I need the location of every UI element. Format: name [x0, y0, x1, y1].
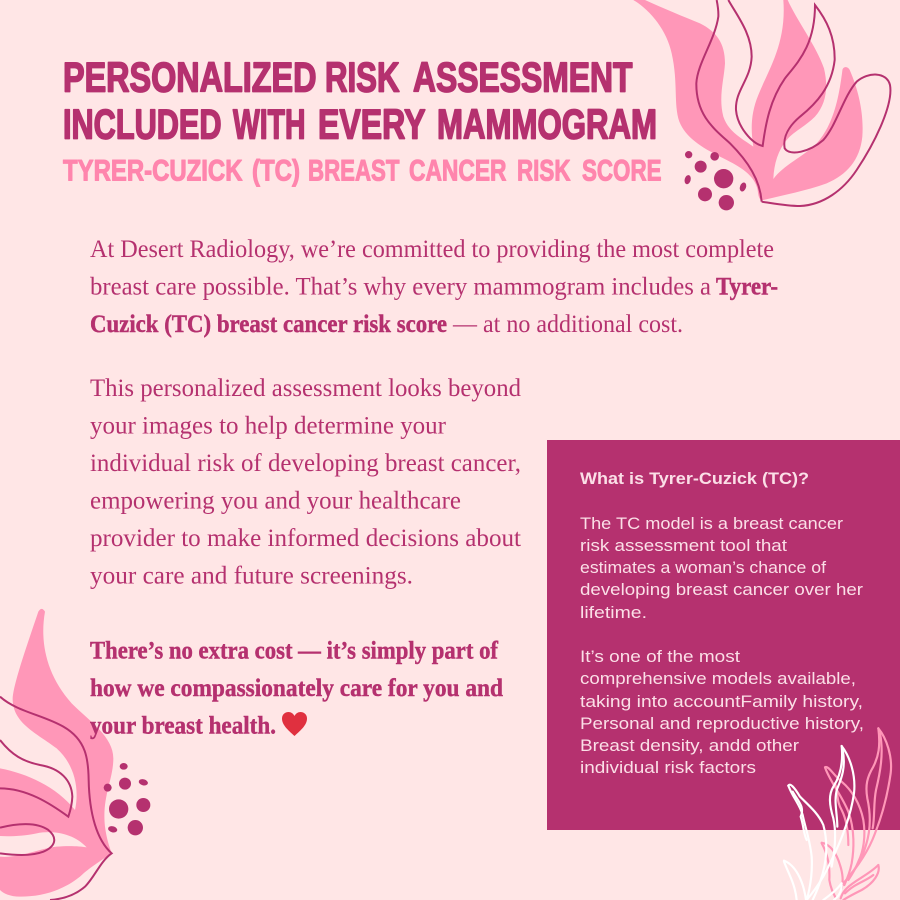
paragraph: personalized assessment: provider to make informed decisions about	[90, 525, 521, 552]
decoration: top-right floral leaves	[633, 0, 890, 210]
subtitle: SCORE	[582, 154, 662, 188]
title heading	[63, 54, 657, 148]
title heading: MAMMOGRAM	[437, 100, 657, 148]
paragraph: personalized assessment: your care and future screenings.	[90, 562, 413, 590]
callout: no extra cost: your breast health.	[90, 712, 276, 740]
subtitle: BREAST	[308, 154, 400, 188]
panel text: definition: risk assessment tool that	[580, 536, 787, 555]
panel text: risk factors	[580, 647, 864, 777]
panel heading: What is Tyrer-Cuzick (TC)?	[580, 469, 809, 488]
title heading: WITH	[233, 100, 306, 148]
panel text: definition	[580, 514, 863, 622]
panel text: definition: The TC model is a breast cancer	[580, 514, 843, 533]
intro paragraph: At Desert Radiology, we’re committed to providing the most complete	[90, 236, 774, 263]
decoration: bottom-right seaweed lines	[784, 728, 891, 900]
panel text: risk factors: Personal and reproductive history,	[580, 714, 864, 733]
intro paragraph: Tyrer-	[716, 274, 778, 300]
title heading: ASSESSMENT	[413, 54, 633, 100]
paragraph: personalized assessment: empowering you and your healthcare	[90, 488, 461, 514]
subtitle: CANCER	[409, 154, 507, 188]
title heading: PERSONALIZED	[63, 54, 316, 100]
intro paragraph: breast care possible. That’s why every mammogram includes a	[90, 274, 711, 300]
decoration: bottom-left floral leaves	[0, 609, 150, 900]
callout: no extra cost: There’s no extra cost — it’s simply part of	[90, 638, 499, 664]
panel text: definition: estimates a woman’s chance of	[580, 558, 826, 577]
title heading: EVERY	[318, 100, 426, 148]
subtitle	[63, 154, 662, 188]
intro paragraph	[90, 236, 778, 338]
paragraph: personalized assessment: This personalized assessment looks beyond	[90, 375, 521, 402]
subtitle: RISK	[517, 154, 571, 188]
paragraph: personalized assessment: your images to help determine your	[90, 412, 447, 440]
panel text: definition: developing breast cancer over her	[580, 580, 863, 599]
icon: red heart	[282, 712, 307, 736]
panel text: risk factors: taking into accountFamily history,	[580, 692, 863, 711]
paragraph: personalized assessment	[90, 375, 521, 590]
panel text: risk factors: individual risk factors	[580, 758, 756, 777]
callout: no extra cost	[90, 638, 503, 740]
paragraph: personalized assessment: individual risk of developing breast cancer,	[90, 450, 521, 477]
callout: no extra cost: how we compassionately care for you and	[90, 675, 503, 702]
panel text: risk factors: Breast density, andd other	[580, 736, 799, 755]
panel: what is Tyrer-Cuzick	[547, 440, 900, 830]
title heading: RISK	[325, 54, 400, 100]
intro paragraph: Cuzick (TC) breast cancer risk score	[90, 311, 447, 338]
panel text: risk factors: comprehensive models available,	[580, 669, 856, 688]
panel text: risk factors: It’s one of the most	[580, 647, 740, 666]
subtitle: (TC)	[252, 154, 300, 188]
intro paragraph: — at no additional cost.	[452, 311, 683, 338]
subtitle: TYRER-CUZICK	[63, 154, 243, 188]
panel text: definition: lifetime.	[580, 603, 647, 622]
title heading: INCLUDED	[63, 100, 222, 148]
